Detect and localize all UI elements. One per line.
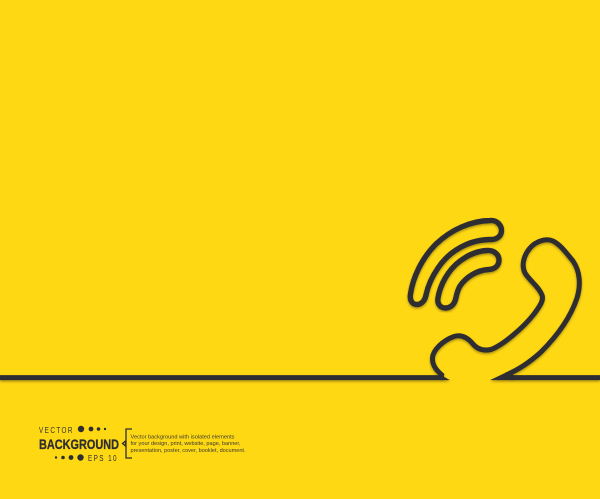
text: description: presentation, poster, cover, booklet, document.	[130, 448, 246, 454]
outer wave	[410, 220, 502, 304]
logo: vector background	[39, 425, 246, 463]
icon: signal waves	[410, 220, 502, 308]
text: BACKGROUND: BACKGROUND	[39, 437, 119, 452]
text: description: for your design, print, website, page, banner,	[130, 441, 241, 447]
text: description: Vector background with isolated elements	[130, 434, 235, 440]
phone line with handset	[0, 240, 600, 380]
text: description	[130, 434, 246, 454]
bracket	[122, 429, 132, 458]
dots: bottom row	[55, 454, 84, 461]
inner wave	[438, 250, 499, 308]
text: VECTOR: VECTOR	[39, 425, 74, 435]
dots: top row	[78, 426, 106, 432]
text: EPS 10: EPS 10	[88, 453, 118, 463]
